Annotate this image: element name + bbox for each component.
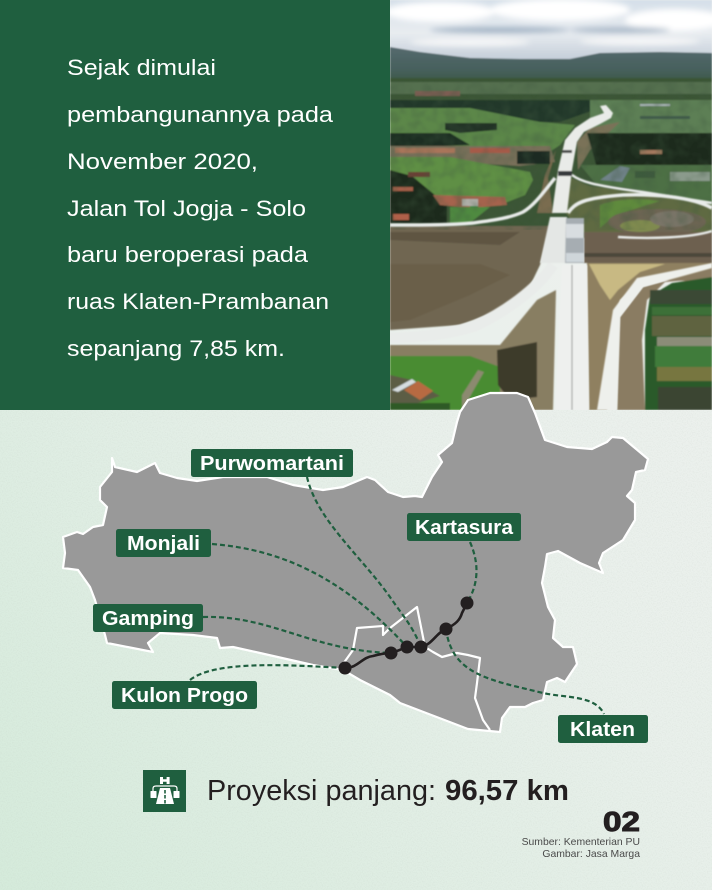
intro text block: Sejak dimulai bbox=[67, 55, 216, 80]
photo: toll road interchange aerial view bbox=[385, 0, 712, 410]
label: Kartasura: Kartasura bbox=[415, 517, 514, 539]
source credits: Gambar: Jasa Marga bbox=[542, 849, 640, 860]
intro text block: baru beroperasi pada bbox=[67, 242, 309, 267]
toll road route with interchange dots bbox=[338, 596, 474, 674]
label: Monjali bbox=[116, 529, 211, 557]
intro text block: sepanjang 7,85 km. bbox=[67, 336, 285, 361]
label: Kartasura bbox=[407, 513, 521, 541]
map region outline bbox=[63, 393, 648, 732]
connector: Gamping dashed line bbox=[203, 617, 390, 653]
intro text block bbox=[67, 55, 334, 361]
label: Gamping bbox=[93, 604, 203, 632]
projected length statement: 96,57 km bbox=[445, 775, 569, 807]
intro text block: ruas Klaten-Prambanan bbox=[67, 289, 329, 314]
connector: Monjali dashed line bbox=[212, 544, 407, 647]
connector: Klaten dashed line bbox=[446, 629, 604, 714]
connector: Kulon Progo dashed line bbox=[190, 665, 345, 680]
icon: toll road bbox=[143, 770, 186, 812]
map: Central Java and Yogyakarta bbox=[63, 393, 648, 732]
intro text block: November 2020, bbox=[67, 149, 258, 174]
source credits: Sumber: Kementerian PU bbox=[522, 837, 640, 848]
label: Kulon Progo bbox=[112, 681, 257, 709]
page number: 02 bbox=[603, 806, 640, 837]
source credits bbox=[522, 837, 640, 860]
connector: Kartasura dashed line bbox=[467, 542, 476, 603]
intro text block: pembangunannya pada bbox=[67, 102, 334, 127]
panel: intro text background bbox=[0, 0, 390, 410]
connector: Purwomartani dashed line bbox=[307, 477, 420, 645]
label: Purwomartani bbox=[191, 449, 353, 477]
label: Klaten bbox=[558, 715, 648, 743]
label: Gamping: Gamping bbox=[102, 608, 194, 630]
intro text block: Jalan Tol Jogja - Solo bbox=[67, 196, 306, 221]
projected length statement bbox=[207, 775, 569, 807]
label: Klaten: Klaten bbox=[570, 719, 635, 741]
projected length statement: Proyeksi panjang: bbox=[207, 775, 436, 807]
label: Purwomartani: Purwomartani bbox=[200, 453, 344, 475]
label: Kulon Progo: Kulon Progo bbox=[121, 685, 248, 707]
label: Monjali: Monjali bbox=[127, 533, 200, 555]
map internal boundary: Yogyakarta and Surakarta bbox=[343, 607, 490, 730]
